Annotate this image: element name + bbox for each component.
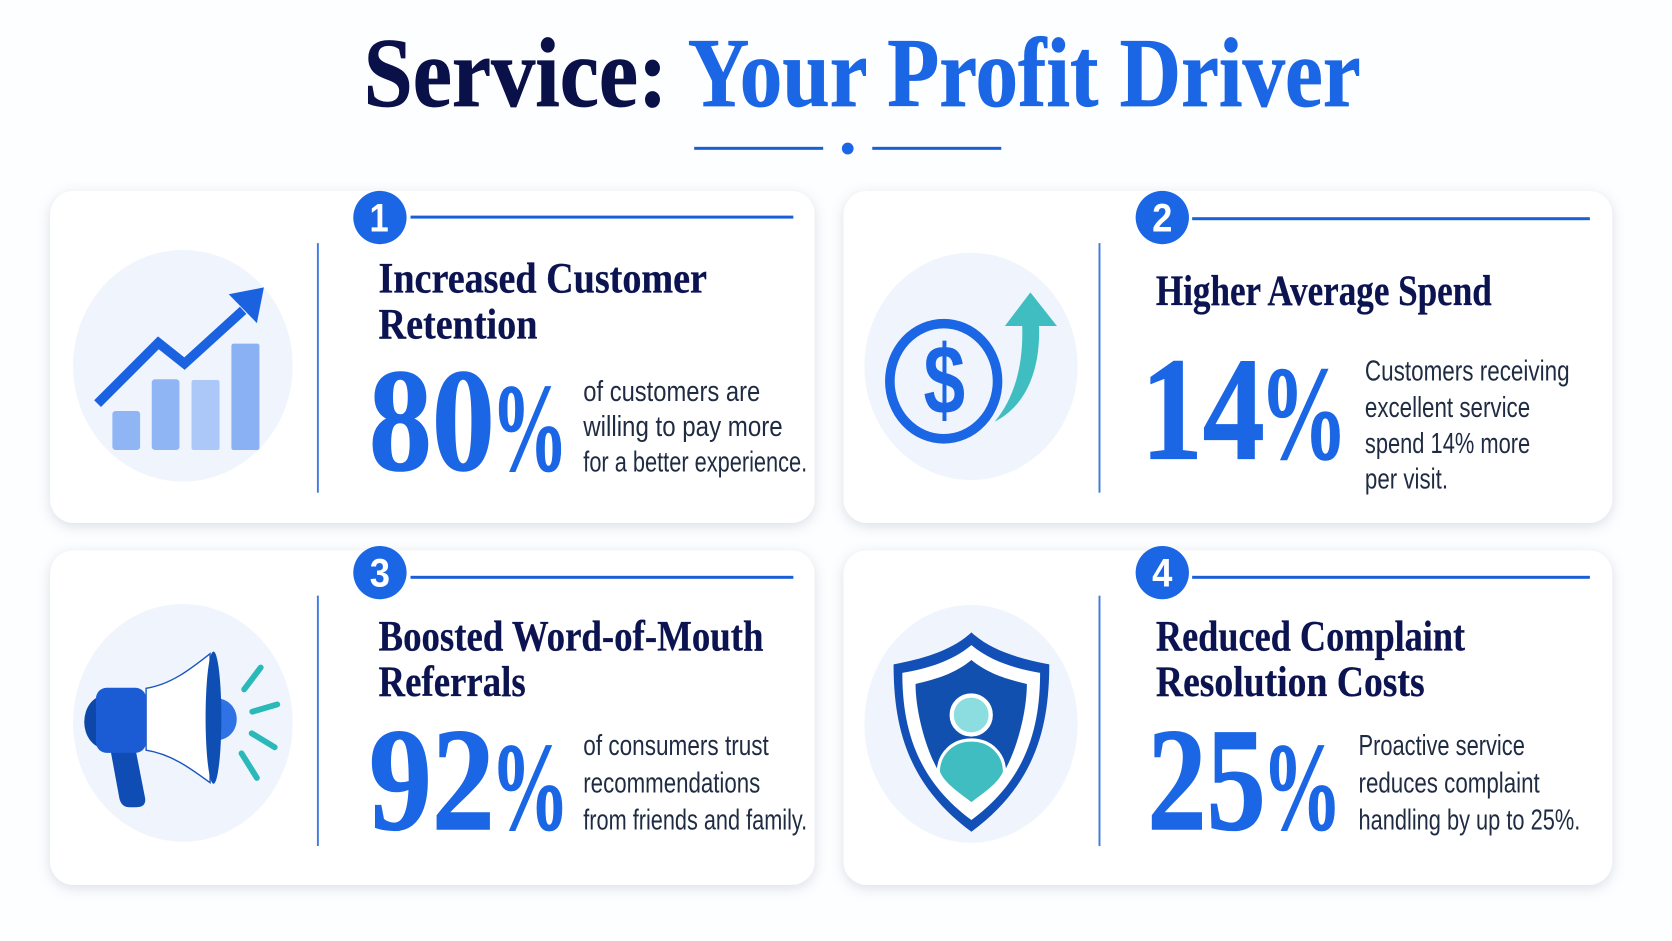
number badge 3: 3	[370, 551, 390, 595]
description	[1359, 729, 1580, 836]
description: per visit.	[1365, 462, 1448, 494]
description: excellent service	[1365, 391, 1530, 423]
number badge 1: 1	[369, 196, 389, 240]
statistic: 25%: %	[1262, 719, 1342, 858]
icon: dollar coin with arrow	[864, 253, 1078, 480]
description: willing to pay more	[582, 410, 783, 442]
statistic: 92%: 92	[369, 698, 495, 861]
title divider	[694, 143, 1001, 154]
description: reduces complaint	[1359, 766, 1540, 798]
panel: card 2 average spend	[843, 191, 1612, 523]
statistic: 14%: 14	[1141, 328, 1265, 491]
description	[1365, 355, 1570, 494]
statistic: 14%: %	[1259, 340, 1348, 489]
description: from friends and family.	[583, 804, 807, 836]
statistic: 80%: 80	[369, 339, 495, 502]
number badge 4: 4	[1152, 551, 1172, 595]
heading: increased customer retention: Retention	[379, 302, 537, 349]
icon: megaphone	[73, 604, 293, 842]
number badge 2: 2	[1152, 196, 1172, 240]
number badge 2	[1136, 191, 1189, 244]
description: Customers receiving	[1365, 355, 1570, 387]
description	[583, 729, 807, 836]
heading: increased customer retention	[379, 256, 707, 349]
description: handling by up to 25%.	[1359, 804, 1580, 836]
heading: increased customer retention: Increased Customer	[379, 256, 707, 303]
number badge 4	[1136, 546, 1189, 599]
number badge 1	[353, 191, 407, 244]
description	[582, 375, 807, 477]
panel: card 1 customer retention	[50, 191, 815, 523]
statistic: 25%: 25	[1147, 698, 1266, 861]
heading: reduced complaint resolution costs: Resolution Costs	[1156, 659, 1425, 706]
heading: boosted word-of-mouth referrals: Boosted Word-of-Mouth	[379, 613, 763, 660]
icon: dollar coin with arrow: $	[923, 325, 965, 435]
title: Your Profit Driver	[688, 20, 1361, 128]
panel: card 4 complaint resolution	[843, 546, 1612, 885]
heading: boosted word-of-mouth referrals	[379, 613, 763, 706]
title: Service:	[364, 20, 668, 128]
description: recommendations	[583, 766, 760, 798]
heading: higher average spend: Higher Average Spend	[1156, 268, 1492, 315]
description: of consumers trust	[583, 729, 769, 761]
icon: shield with person	[864, 605, 1078, 843]
number badge 3	[353, 546, 407, 599]
icon: growth chart	[73, 250, 293, 482]
heading: boosted word-of-mouth referrals: Referrals	[379, 659, 526, 706]
description: Proactive service	[1359, 729, 1525, 761]
statistic: 80%: %	[491, 359, 568, 498]
panel: card 3 word-of-mouth referrals	[50, 546, 815, 885]
heading: reduced complaint resolution costs: Reduced Complaint	[1156, 613, 1466, 660]
statistic: 92%: %	[491, 719, 569, 858]
heading: reduced complaint resolution costs	[1156, 613, 1466, 706]
title	[364, 20, 1361, 128]
description: spend 14% more	[1365, 427, 1530, 459]
description: of customers are	[583, 375, 760, 407]
description: for a better experience.	[583, 445, 807, 477]
